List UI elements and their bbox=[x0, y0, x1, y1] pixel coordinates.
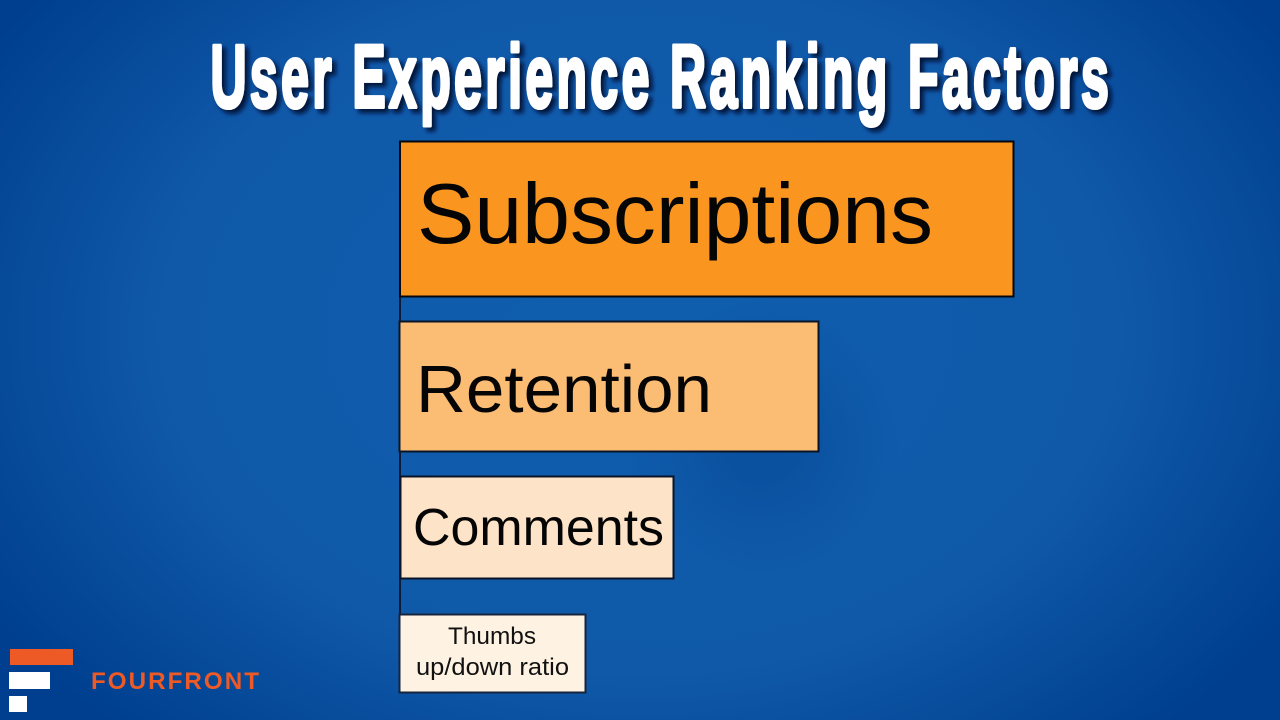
bar: retention bbox=[400, 322, 818, 452]
bar: retention: Retention bbox=[416, 352, 712, 427]
bar: comments bbox=[400, 476, 674, 578]
bar: comments: Comments bbox=[413, 499, 664, 557]
bar: thumbs up/down ratio: up/down ratio bbox=[416, 654, 569, 681]
bar chart: ranking factors bbox=[400, 142, 1014, 692]
bar: thumbs up/down ratio: Thumbs bbox=[448, 623, 536, 650]
logo wordmark: FOURFRONT bbox=[91, 668, 261, 695]
chart axis bbox=[399, 141, 401, 693]
bar: subscriptions: Subscriptions bbox=[417, 167, 933, 262]
icon: logo bars bbox=[9, 649, 73, 712]
bar: thumbs up/down ratio bbox=[400, 614, 586, 692]
bar: subscriptions bbox=[400, 142, 1014, 296]
title: User Experience Ranking Factors bbox=[210, 28, 1109, 127]
logo: fourfront bbox=[9, 649, 261, 712]
